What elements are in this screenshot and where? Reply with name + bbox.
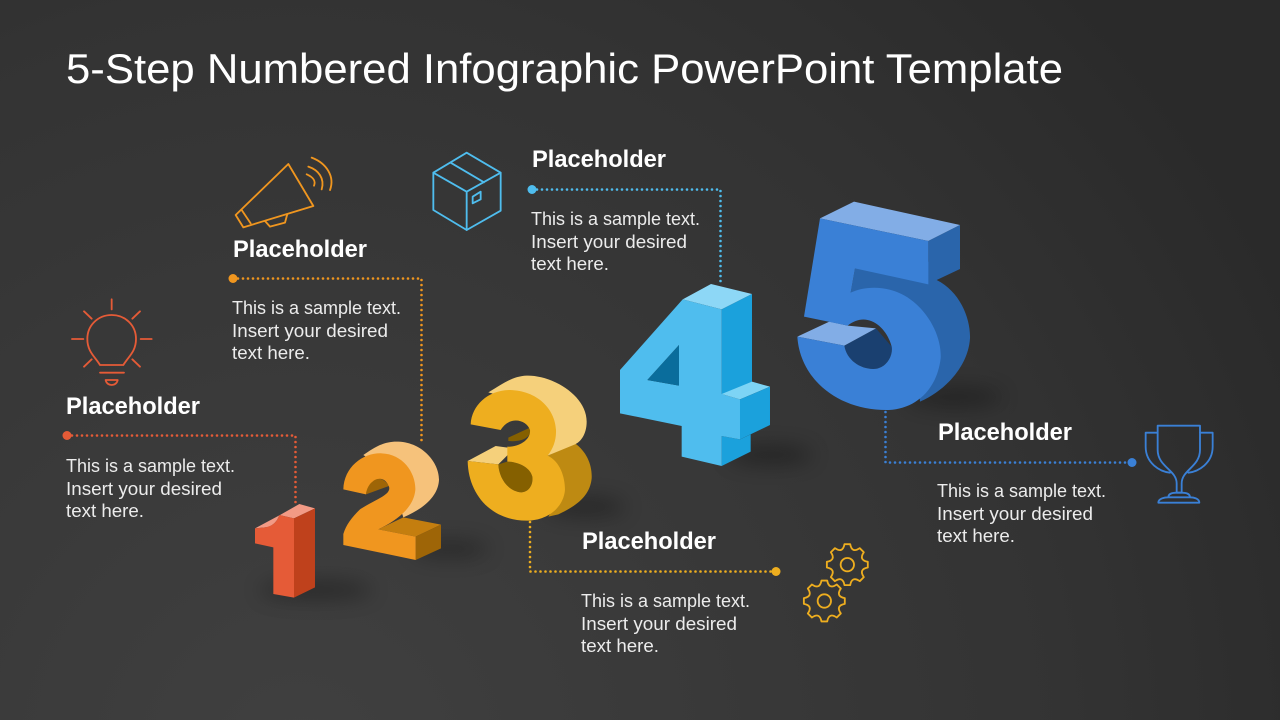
text block: step 1: Placeholder xyxy=(66,393,200,420)
text block: step 2: Placeholder xyxy=(233,236,367,263)
text block: step 2: Insert your desired xyxy=(232,320,388,341)
shadow: digit 1 xyxy=(260,581,372,599)
text block: step 3: Placeholder xyxy=(582,528,716,555)
text block: step 5: This is a sample text. xyxy=(937,480,1106,501)
text block: step 3 xyxy=(581,528,750,656)
text block: step 5: Insert your desired xyxy=(937,503,1093,524)
text block: step 3: This is a sample text. xyxy=(581,590,750,611)
text block: step 4 xyxy=(531,146,700,274)
text block: step 4: text here. xyxy=(531,253,609,274)
connector line: step 3 xyxy=(530,522,780,576)
text block: step 5: text here. xyxy=(937,525,1015,546)
shadow: digit 5 xyxy=(907,387,1003,407)
text block: step 1: This is a sample text. xyxy=(66,455,235,476)
text block: step 2 xyxy=(232,236,401,363)
icon: gears xyxy=(804,544,868,621)
shadow: digit 4 xyxy=(728,446,812,464)
text block: step 2: text here. xyxy=(232,342,310,363)
digit 4 xyxy=(620,284,770,466)
digit 2 xyxy=(343,442,441,560)
text block: step 4: Insert your desired xyxy=(531,231,687,252)
text block: step 5 xyxy=(937,419,1106,546)
connector line: step 2 xyxy=(228,274,422,445)
icon: light bulb xyxy=(72,299,152,385)
icon: box xyxy=(433,153,501,230)
text block: step 5: Placeholder xyxy=(938,419,1072,446)
connector line: step 4 xyxy=(528,185,720,285)
text block: step 3: Insert your desired xyxy=(581,613,737,634)
icon: megaphone xyxy=(236,158,331,227)
digit 1 xyxy=(255,504,315,598)
connector line: step 1 xyxy=(62,431,296,503)
text block: step 4: This is a sample text. xyxy=(531,208,700,229)
text block: step 1 xyxy=(66,393,235,521)
text block: step 1: Insert your desired xyxy=(66,478,222,499)
connector line: step 5 xyxy=(886,412,1136,467)
digit 3 xyxy=(468,376,592,521)
shadow: digit 2 xyxy=(412,541,488,557)
icon: trophy xyxy=(1146,426,1213,503)
text block: step 1: text here. xyxy=(66,500,144,521)
text block: step 4: Placeholder xyxy=(532,146,666,173)
text block: step 3: text here. xyxy=(581,635,659,656)
title: 5-Step Numbered Infographic PowerPoint Template xyxy=(66,45,1063,92)
digit 5 xyxy=(797,202,970,410)
text block: step 2: This is a sample text. xyxy=(232,297,401,318)
shadow: digit 3 xyxy=(545,498,625,516)
